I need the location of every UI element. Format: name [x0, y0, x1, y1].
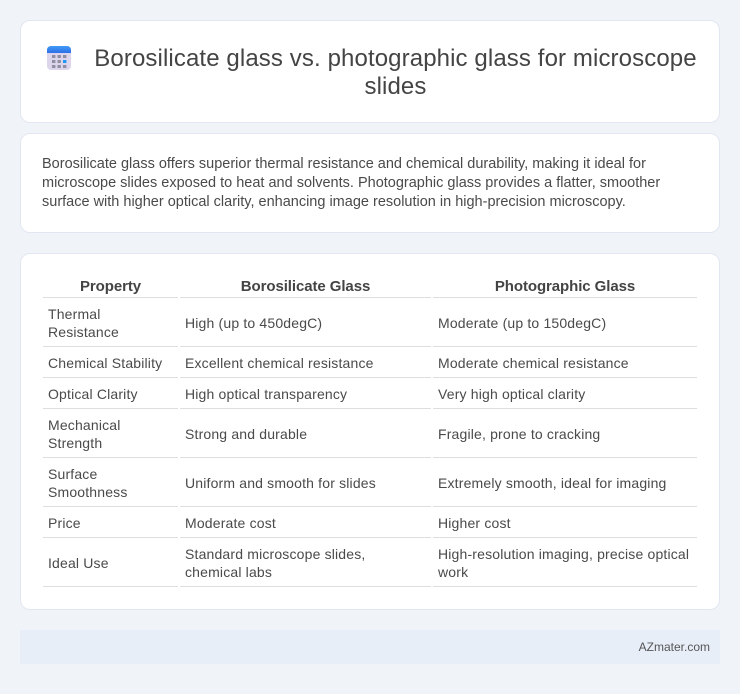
row: optical clarity: Very high optical clarity	[438, 386, 585, 402]
row: thermal resistance: Moderate (up to 150degC)	[438, 315, 606, 331]
description text: microscope slides exposed to heat and solvents. Photographic glass provides a flatter, smoother	[42, 175, 660, 191]
panel: comparison table	[20, 253, 720, 610]
row: mechanical strength: Mechanical	[48, 417, 121, 433]
row: ideal use	[48, 546, 689, 580]
row: chemical stability	[48, 355, 629, 371]
panel: title card	[20, 20, 720, 123]
description text: surface with higher optical clarity, enhancing image resolution in high-precision microscopy.	[42, 194, 626, 210]
row: mechanical strength: Strength	[48, 435, 102, 451]
row: surface smoothness	[48, 466, 666, 500]
table header	[80, 278, 635, 295]
row: optical clarity: Optical Clarity	[48, 386, 138, 402]
row: chemical stability: Moderate chemical resistance	[438, 355, 629, 371]
row: ideal use: chemical labs	[185, 564, 272, 580]
row: ideal use: work	[438, 564, 468, 580]
row: optical clarity	[48, 386, 586, 402]
row: surface smoothness: Surface	[48, 466, 97, 482]
table header: Property	[80, 278, 141, 295]
footer bar	[20, 630, 720, 664]
description text: Borosilicate glass offers superior thermal resistance and chemical durability, making it ideal for	[42, 156, 646, 172]
row: optical clarity: High optical transparency	[185, 386, 347, 402]
row: ideal use: High-resolution imaging, precise optical	[438, 546, 689, 562]
row: ideal use: Ideal Use	[48, 555, 109, 571]
row: thermal resistance: Resistance	[48, 324, 119, 340]
row: price: Moderate cost	[185, 515, 276, 531]
row: surface smoothness: Smoothness	[48, 484, 128, 500]
row: chemical stability: Chemical Stability	[48, 355, 162, 371]
row: surface smoothness: Uniform and smooth for slides	[185, 475, 376, 491]
title: Borosilicate glass vs. photographic glass for microscope slides	[94, 45, 697, 100]
table header: Photographic Glass	[495, 278, 635, 295]
row: thermal resistance	[48, 306, 606, 340]
row: chemical stability: Excellent chemical resistance	[185, 355, 374, 371]
row: mechanical strength	[48, 417, 600, 451]
row: price: Price	[48, 515, 81, 531]
row: price: Higher cost	[438, 515, 511, 531]
row: thermal resistance: High (up to 450degC)	[185, 315, 322, 331]
row: mechanical strength: Fragile, prone to cracking	[438, 426, 600, 442]
row: thermal resistance: Thermal	[48, 306, 101, 322]
panel: description	[20, 133, 720, 233]
row: mechanical strength: Strong and durable	[185, 426, 307, 442]
row: ideal use: Standard microscope slides,	[185, 546, 365, 562]
row: price	[48, 515, 511, 531]
description text	[42, 156, 660, 210]
row: surface smoothness: Extremely smooth, ideal for imaging	[438, 475, 666, 491]
icon: calendar	[47, 46, 71, 70]
footer credit: AZmater.com	[639, 640, 710, 654]
table header: Borosilicate Glass	[241, 278, 370, 295]
